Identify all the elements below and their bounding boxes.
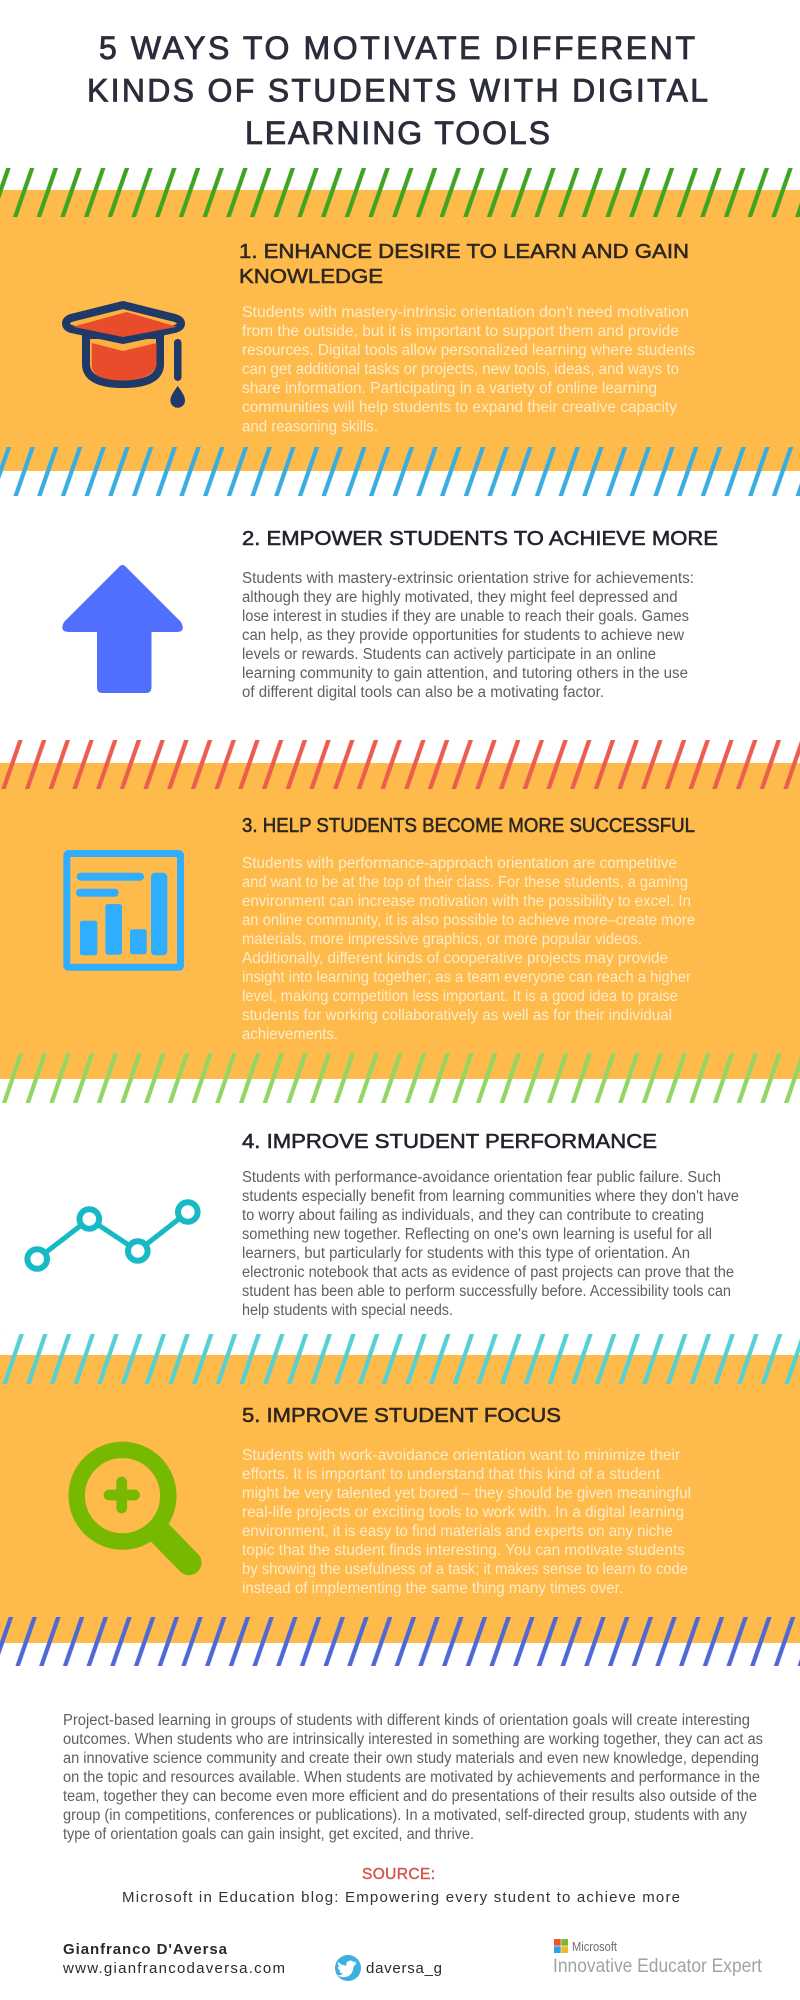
text: section 5 body: instead of implementing the same thing many times over. bbox=[242, 1580, 623, 1597]
text: section 2 body: lose interest in studies if they are unable to reach their goals. Games bbox=[242, 608, 689, 625]
text: section 5 body bbox=[242, 1447, 691, 1597]
author credit bbox=[62, 1941, 285, 1977]
text: section 3 body: environment can increase motivation with the possibility to excel. In bbox=[242, 893, 691, 910]
icon: magnifying glass bbox=[77, 1450, 189, 1563]
text: section 2 body: levels or rewards. Students can actively participate in an online bbox=[242, 646, 656, 663]
text: section 3 body: Students with performance-approach orientation are competitive bbox=[242, 855, 677, 872]
title: LEARNING TOOLS bbox=[245, 115, 550, 151]
logo: Microsoft Innovative Educator Expert: Microsoft bbox=[572, 1940, 617, 1954]
text: section 3 body: Additionally, different kinds of cooperative projects may provide bbox=[242, 950, 668, 967]
icon: up arrow bbox=[62, 565, 183, 693]
text: section 2 body bbox=[242, 570, 694, 701]
heading: section 1: 1. ENHANCE DESIRE TO LEARN AND GAIN bbox=[239, 240, 689, 263]
text: section 1 body: can get additional tasks or projects, new tools, ideas, and ways to bbox=[242, 361, 679, 378]
twitter handle: daversa_g bbox=[366, 1960, 442, 1977]
text: closing paragraph bbox=[63, 1712, 763, 1843]
logo: Microsoft Innovative Educator Expert: Innovative Educator Expert bbox=[553, 1956, 763, 1977]
text: section 1 body: Students with mastery-intrinsic orientation don't need motivation bbox=[242, 304, 689, 321]
text: section 3 body: achievements. bbox=[242, 1026, 338, 1043]
text: section 5 body: environment, it is easy to find materials and experts on any niche bbox=[242, 1523, 673, 1540]
text: section 5 body: topic that the student finds interesting. You can motivate students bbox=[242, 1542, 685, 1559]
text: section 5 body: Students with work-avoidance orientation want to minimize their bbox=[242, 1447, 680, 1464]
text: section 1 body: share information. Participating in a variety of online learning bbox=[242, 380, 657, 397]
blue stripe band bbox=[0, 447, 800, 496]
text: section 1 body bbox=[242, 304, 695, 436]
text: section 2 body: learning community to gain attention, and tutoring others in the use bbox=[242, 665, 688, 682]
author credit: Gianfranco D'Aversa bbox=[63, 1941, 228, 1958]
text: closing paragraph: on the topic and resources available. When students are motivated by achievements and performance in the bbox=[63, 1769, 760, 1786]
text: section 1 body: communities will help students to expand their creative capacity bbox=[242, 399, 677, 416]
text: section 4 body: learners, but particularly for students with this type of orientation. An bbox=[242, 1245, 690, 1262]
green stripe band bbox=[0, 168, 800, 217]
text: closing paragraph: an innovative science community and create their own study materials and even new knowledge, depending bbox=[63, 1750, 759, 1767]
text: section 4 body: help students with special needs. bbox=[242, 1302, 453, 1319]
text: section 5 body: might be very talented yet bored – they should be given meaningful bbox=[242, 1485, 691, 1502]
text: section 3 body: and want to be at the top of their class. For these students, a gaming bbox=[242, 874, 688, 891]
heading: section 1 bbox=[239, 240, 689, 288]
text: section 3 body: materials, more impressive graphics, or more popular videos. bbox=[242, 931, 642, 948]
text: section 4 body: electronic notebook that acts as evidence of past projects can prove that the bbox=[242, 1264, 734, 1281]
icon: graduation cap bbox=[66, 305, 185, 408]
text: section 2 body: although they are highly motivated, they might feel depressed and bbox=[242, 589, 678, 606]
text: section 3 body: insight into learning together; as a team everyone can reach a higher bbox=[242, 969, 691, 986]
heading: section 3: 3. HELP STUDENTS BECOME MORE SUCCESSFUL bbox=[242, 814, 695, 837]
logo: Microsoft Innovative Educator Expert bbox=[553, 1939, 763, 1977]
source label: SOURCE: bbox=[362, 1866, 435, 1883]
text: closing paragraph: outcomes. When students who are intrinsically interested in something are working together, they can act as bbox=[63, 1731, 763, 1748]
dark blue stripe band bbox=[0, 1617, 800, 1666]
source text: Microsoft in Education blog: Empowering every student to achieve more bbox=[122, 1889, 680, 1906]
text: section 5 body: by showing the usefulness of a task; it makes sense to learn to code bbox=[242, 1561, 688, 1578]
text: closing paragraph: group (in competitions, conferences or publications). In a motivated, self-directed group, students with any bbox=[63, 1807, 747, 1824]
red stripe band bbox=[0, 740, 800, 789]
text: section 2 body: can help, as they provide opportunities for students to achieve new bbox=[242, 627, 685, 644]
text: section 4 body: Students with performance-avoidance orientation fear public failure. Such bbox=[242, 1169, 721, 1186]
text: section 1 body: from the outside, but it is important to support them and provide bbox=[242, 323, 679, 340]
text: section 3 body: an online community, it is also possible to achieve more–create more bbox=[242, 912, 695, 929]
text: section 2 body: of different digital tools can also be a motivating factor. bbox=[242, 684, 604, 701]
text: closing paragraph: type of orientation goals can gain insight, get excited, and thrive. bbox=[63, 1826, 474, 1843]
text: section 3 body bbox=[242, 855, 695, 1043]
heading: section 2: 2. EMPOWER STUDENTS TO ACHIEVE MORE bbox=[242, 527, 718, 550]
text: section 3 body: students for working collaboratively as well as for their individual bbox=[242, 1007, 672, 1024]
icon: twitter bbox=[335, 1955, 361, 1981]
author credit: www.gianfrancodaversa.com bbox=[62, 1960, 285, 1977]
panel: section 3 background bbox=[0, 763, 800, 1079]
panel: section 1 background bbox=[0, 190, 800, 471]
icon: bar chart report bbox=[67, 854, 180, 967]
title bbox=[87, 30, 708, 151]
light green stripe band bbox=[0, 1053, 800, 1103]
heading: section 4: 4. IMPROVE STUDENT PERFORMANCE bbox=[242, 1130, 657, 1153]
text: section 1 body: and reasoning skills. bbox=[242, 418, 378, 436]
text: section 4 body: to worry about failing as individuals, and they can contribute to creating bbox=[242, 1207, 704, 1224]
text: section 4 body: student has been able to perform successfully before. Accessibility tools can bbox=[242, 1283, 731, 1300]
text: closing paragraph: team, together they can become even more efficient and do presentations of their results also outside of the bbox=[63, 1788, 757, 1805]
text: section 1 body: resources. Digital tools allow personalized learning where students bbox=[242, 342, 695, 359]
text: section 5 body: real-life projects or exciting tools to work with. In a digital learning bbox=[242, 1504, 684, 1521]
panel: section 5 background bbox=[0, 1355, 800, 1643]
title: 5 WAYS TO MOTIVATE DIFFERENT bbox=[99, 30, 695, 66]
text: section 4 body: something new together. Reflecting on one's own learning is useful for all bbox=[242, 1226, 712, 1243]
text: section 5 body: efforts. It is important to understand that this kind of a student bbox=[242, 1466, 661, 1483]
text: section 4 body bbox=[242, 1169, 739, 1319]
text: section 2 body: Students with mastery-extrinsic orientation strive for achievements: bbox=[242, 570, 694, 587]
title: KINDS OF STUDENTS WITH DIGITAL bbox=[87, 72, 708, 108]
text: section 4 body: students especially benefit from learning communities where they don't have bbox=[242, 1188, 739, 1205]
teal stripe band bbox=[0, 1334, 800, 1384]
text: closing paragraph: Project-based learning in groups of students with different kinds of orientation goals will create interesting bbox=[63, 1712, 750, 1729]
heading: section 5: 5. IMPROVE STUDENT FOCUS bbox=[242, 1404, 561, 1427]
text: section 3 body: level, making competition less important. It is a good idea to praise bbox=[242, 988, 678, 1005]
heading: section 1: KNOWLEDGE bbox=[239, 265, 383, 288]
icon: line chart bbox=[27, 1202, 198, 1269]
